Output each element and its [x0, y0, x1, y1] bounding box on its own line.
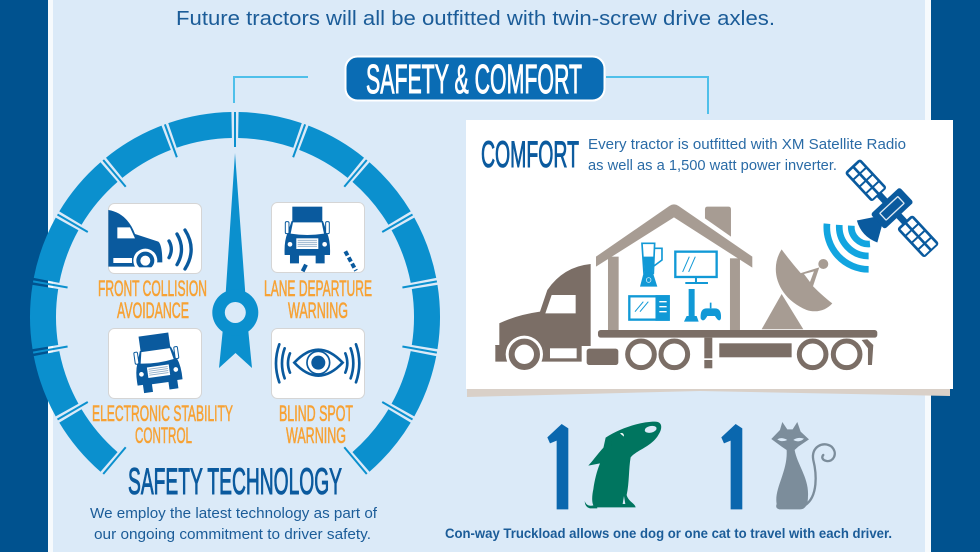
card: blind spot warning [272, 328, 364, 398]
right dark band [925, 0, 980, 552]
number one for cat [721, 424, 742, 509]
card: lane departure warning [272, 202, 364, 272]
orange feature labels: ELECTRONIC STABILITY [92, 401, 233, 426]
comfort description: Every tractor is outfitted with XM Satellite Radio [588, 137, 906, 153]
orange feature labels: LANE DEPARTURE [264, 276, 372, 301]
pet policy caption: Con-way Truckload allows one dog or one cat to travel with each driver. [445, 525, 892, 541]
comfort description [588, 137, 906, 174]
section heading: safety and comfort [346, 56, 604, 102]
tractor cab [495, 264, 591, 373]
icon: eye with waves [276, 344, 359, 382]
signal arcs [827, 224, 870, 269]
orange feature labels: WARNING [288, 298, 348, 323]
icon: truck with sensor waves [108, 210, 191, 273]
panel: comfort [445, 120, 953, 541]
appliances [629, 243, 721, 322]
satellite dish [762, 249, 832, 329]
orange feature labels: BLIND SPOT [279, 401, 353, 426]
orange feature labels: WARNING [286, 423, 346, 448]
safety technology description [90, 505, 378, 543]
section heading: safety and comfort: SAFETY & COMFORT [366, 56, 582, 102]
comfort description: as well as a 1,500 watt power inverter. [588, 158, 837, 174]
icon: truck crossing lane line [285, 207, 356, 271]
orange feature labels [92, 276, 372, 448]
card: front collision avoidance [108, 204, 202, 274]
safety technology description: We employ the latest technology as part of [90, 505, 378, 522]
card: electronic stability control [108, 328, 202, 398]
intro sentence: Future tractors will all be outfitted with twin-screw drive axles. [176, 8, 775, 30]
icon: tilted truck [131, 331, 184, 394]
house [596, 204, 752, 331]
orange feature labels: CONTROL [135, 423, 192, 448]
satellite body and panels [825, 152, 946, 277]
safety technology description: our ongoing commitment to driver safety. [94, 526, 371, 543]
illustration: truck carrying house [495, 204, 877, 373]
heading: safety technology: SAFETY TECHNOLOGY [128, 461, 342, 502]
pet policy graphics [547, 422, 835, 509]
gauge needle [212, 153, 258, 368]
orange feature labels: AVOIDANCE [117, 298, 189, 323]
icon: cat [771, 422, 835, 509]
icon: dog [585, 422, 661, 508]
number one for dog [547, 424, 568, 509]
orange feature labels: FRONT COLLISION [98, 276, 207, 301]
left dark band [0, 0, 53, 552]
icon: satellite with signal [825, 152, 946, 277]
gauge dial [33, 112, 437, 474]
connector lines [234, 77, 708, 114]
heading: comfort: COMFORT [481, 134, 579, 175]
trailer [587, 330, 877, 368]
